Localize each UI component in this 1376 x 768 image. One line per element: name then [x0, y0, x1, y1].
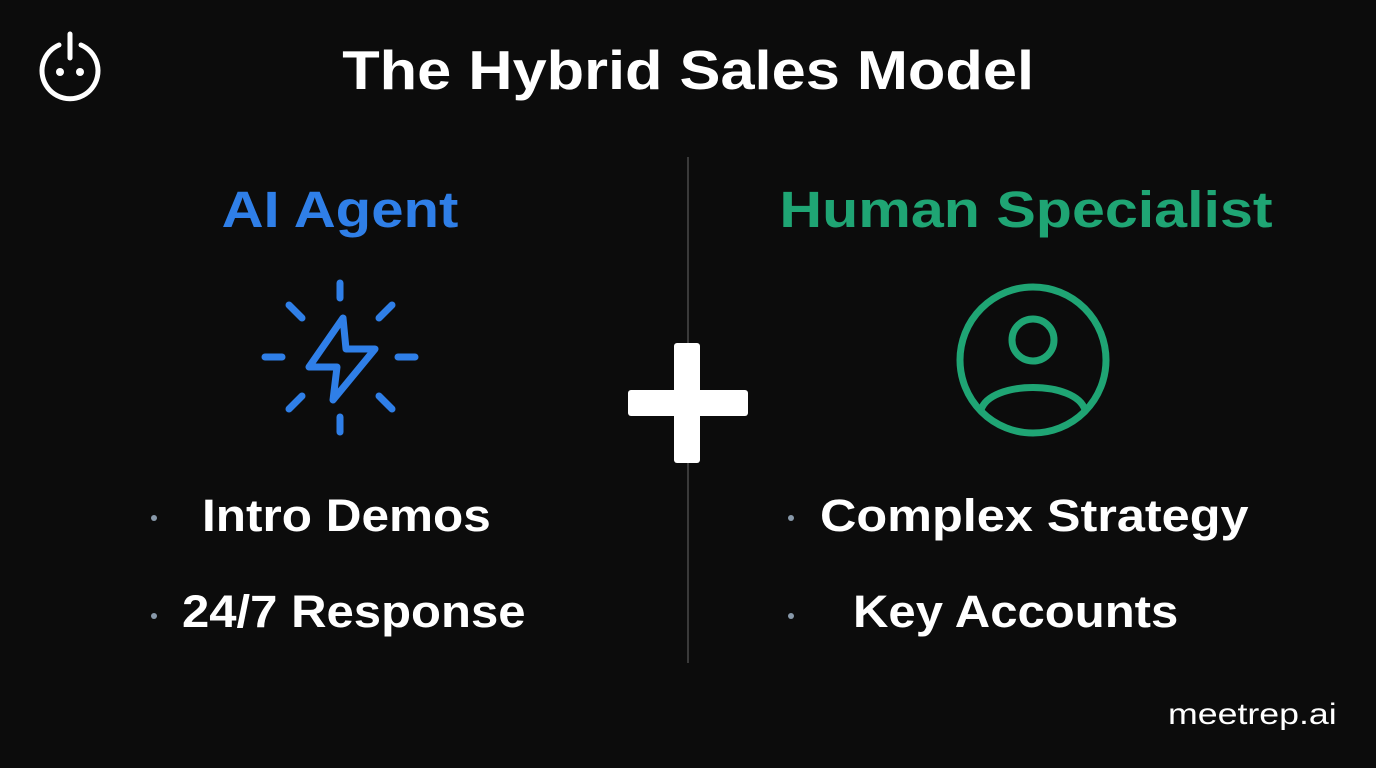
- plus sign: [628, 343, 748, 463]
- item: Key Accounts: Key Accounts: [853, 586, 1178, 637]
- footer brand: meetrep.ai: [1168, 698, 1337, 731]
- bullet 1: [151, 515, 157, 521]
- list: human specialist: [788, 490, 1249, 637]
- divider: [687, 157, 689, 663]
- bullet 1: [788, 515, 794, 521]
- heading: AI Agent: AI Agent: [222, 181, 458, 238]
- list: AI agent: [151, 490, 526, 637]
- icon: person: [956, 284, 1110, 436]
- icon: lightning: [262, 280, 418, 436]
- bullet 2: [151, 613, 157, 619]
- heading: Human Specialist: Human Specialist: [779, 181, 1273, 238]
- item: Complex Strategy: Complex Strategy: [820, 490, 1249, 541]
- item: Intro Demos: Intro Demos: [202, 490, 491, 541]
- bullet 2: [788, 613, 794, 619]
- item: 24/7 Response: 24/7 Response: [182, 586, 526, 637]
- title: The Hybrid Sales Model: [342, 39, 1034, 101]
- logo: power icon: [40, 32, 100, 102]
